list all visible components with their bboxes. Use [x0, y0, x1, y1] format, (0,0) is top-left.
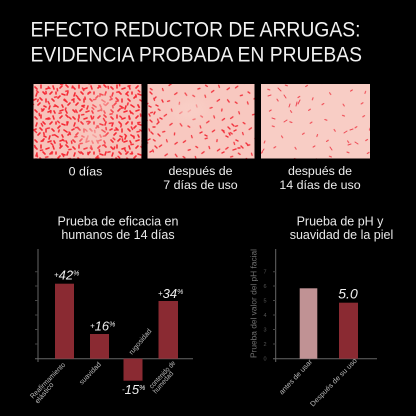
- title: EVIDENCIA PROBADA EN PRUEBAS: [30, 44, 362, 66]
- clearer patch in micrograph: [79, 128, 105, 144]
- caption: after 7 days: después de: [168, 164, 233, 178]
- bar: -15%: -: [122, 385, 125, 394]
- bar: +42%: +: [54, 270, 59, 280]
- heading: pH chart: Prueba de pH y: [297, 214, 384, 228]
- bar: +34%: [158, 286, 183, 359]
- axis labels: contenido de: [147, 359, 177, 390]
- caption: after 7 days: [163, 164, 238, 192]
- axis tick labels: 2: [263, 342, 267, 348]
- bar: +16%: %: [109, 322, 115, 328]
- panel: micrograph after 7 days: [148, 84, 254, 158]
- bar: +42%: 42: [59, 268, 74, 282]
- axis tick labels: 5: [263, 298, 267, 304]
- bar: -15%: 15: [125, 382, 140, 397]
- caption: after 14 days: 14 días de uso: [279, 178, 361, 192]
- heading: efficacy chart: [58, 214, 179, 242]
- caption: 0 days: 0 días: [69, 164, 102, 178]
- panel: micrograph at 0 days: [34, 84, 142, 158]
- axis tick labels: 7: [263, 270, 267, 276]
- axis labels: humedad: [151, 369, 175, 395]
- heading: efficacy chart: humanos de 14 días: [61, 228, 175, 242]
- heading: pH chart: suavidad de la piel: [290, 228, 393, 242]
- bar: after use: [339, 303, 358, 359]
- axis labels: antes de usar: [277, 357, 315, 396]
- value: 5.0: 5.0: [338, 286, 358, 302]
- bar: -15%: [122, 359, 145, 397]
- axis labels: Después de su uso: [308, 356, 359, 408]
- axis labels: suavidad: [77, 360, 103, 386]
- caption: after 14 days: después de: [288, 164, 352, 178]
- bar chart: efficacy: [28, 249, 193, 405]
- bar: +42%: %: [73, 270, 79, 278]
- bar: +42%: [54, 268, 79, 359]
- caption: after 14 days: [279, 164, 361, 192]
- title: [30, 18, 362, 66]
- axis tick labels: 4: [263, 313, 267, 319]
- chart axes: [35, 249, 193, 362]
- bar: +16%: 16: [95, 318, 110, 334]
- axis labels: rugosidad: [127, 327, 153, 356]
- axis labels: Reafirmamiento: [28, 360, 67, 400]
- bar: +34%: %: [177, 289, 183, 296]
- bar: +34%: 34: [163, 286, 177, 301]
- heading: efficacy chart: Prueba de eficacia en: [58, 214, 179, 228]
- axis labels: [277, 356, 359, 408]
- caption: after 7 days: 7 días de uso: [163, 178, 238, 192]
- chart axes: [273, 249, 377, 362]
- axis tick labels: [263, 270, 267, 362]
- panel: micrograph after 14 days: [261, 84, 370, 158]
- axis labels: elástico: [33, 380, 56, 405]
- axis tick labels: 6: [263, 284, 267, 290]
- axis tick labels: 0: [263, 356, 267, 362]
- heading: pH chart: [290, 214, 393, 242]
- bar: +16%: [90, 318, 115, 359]
- bar: +16%: +: [90, 322, 95, 330]
- bar: +34%: +: [158, 289, 163, 298]
- bar: -15%: %: [139, 385, 145, 392]
- bar: before use: [300, 288, 317, 359]
- axis labels: [28, 327, 177, 405]
- bar chart: pH: [248, 249, 377, 408]
- axis tick labels: 3: [263, 328, 267, 334]
- title: EFECTO REDUCTOR DE ARRUGAS:: [30, 18, 360, 42]
- y axis title: Prueba del valor del pH facial: [248, 249, 258, 358]
